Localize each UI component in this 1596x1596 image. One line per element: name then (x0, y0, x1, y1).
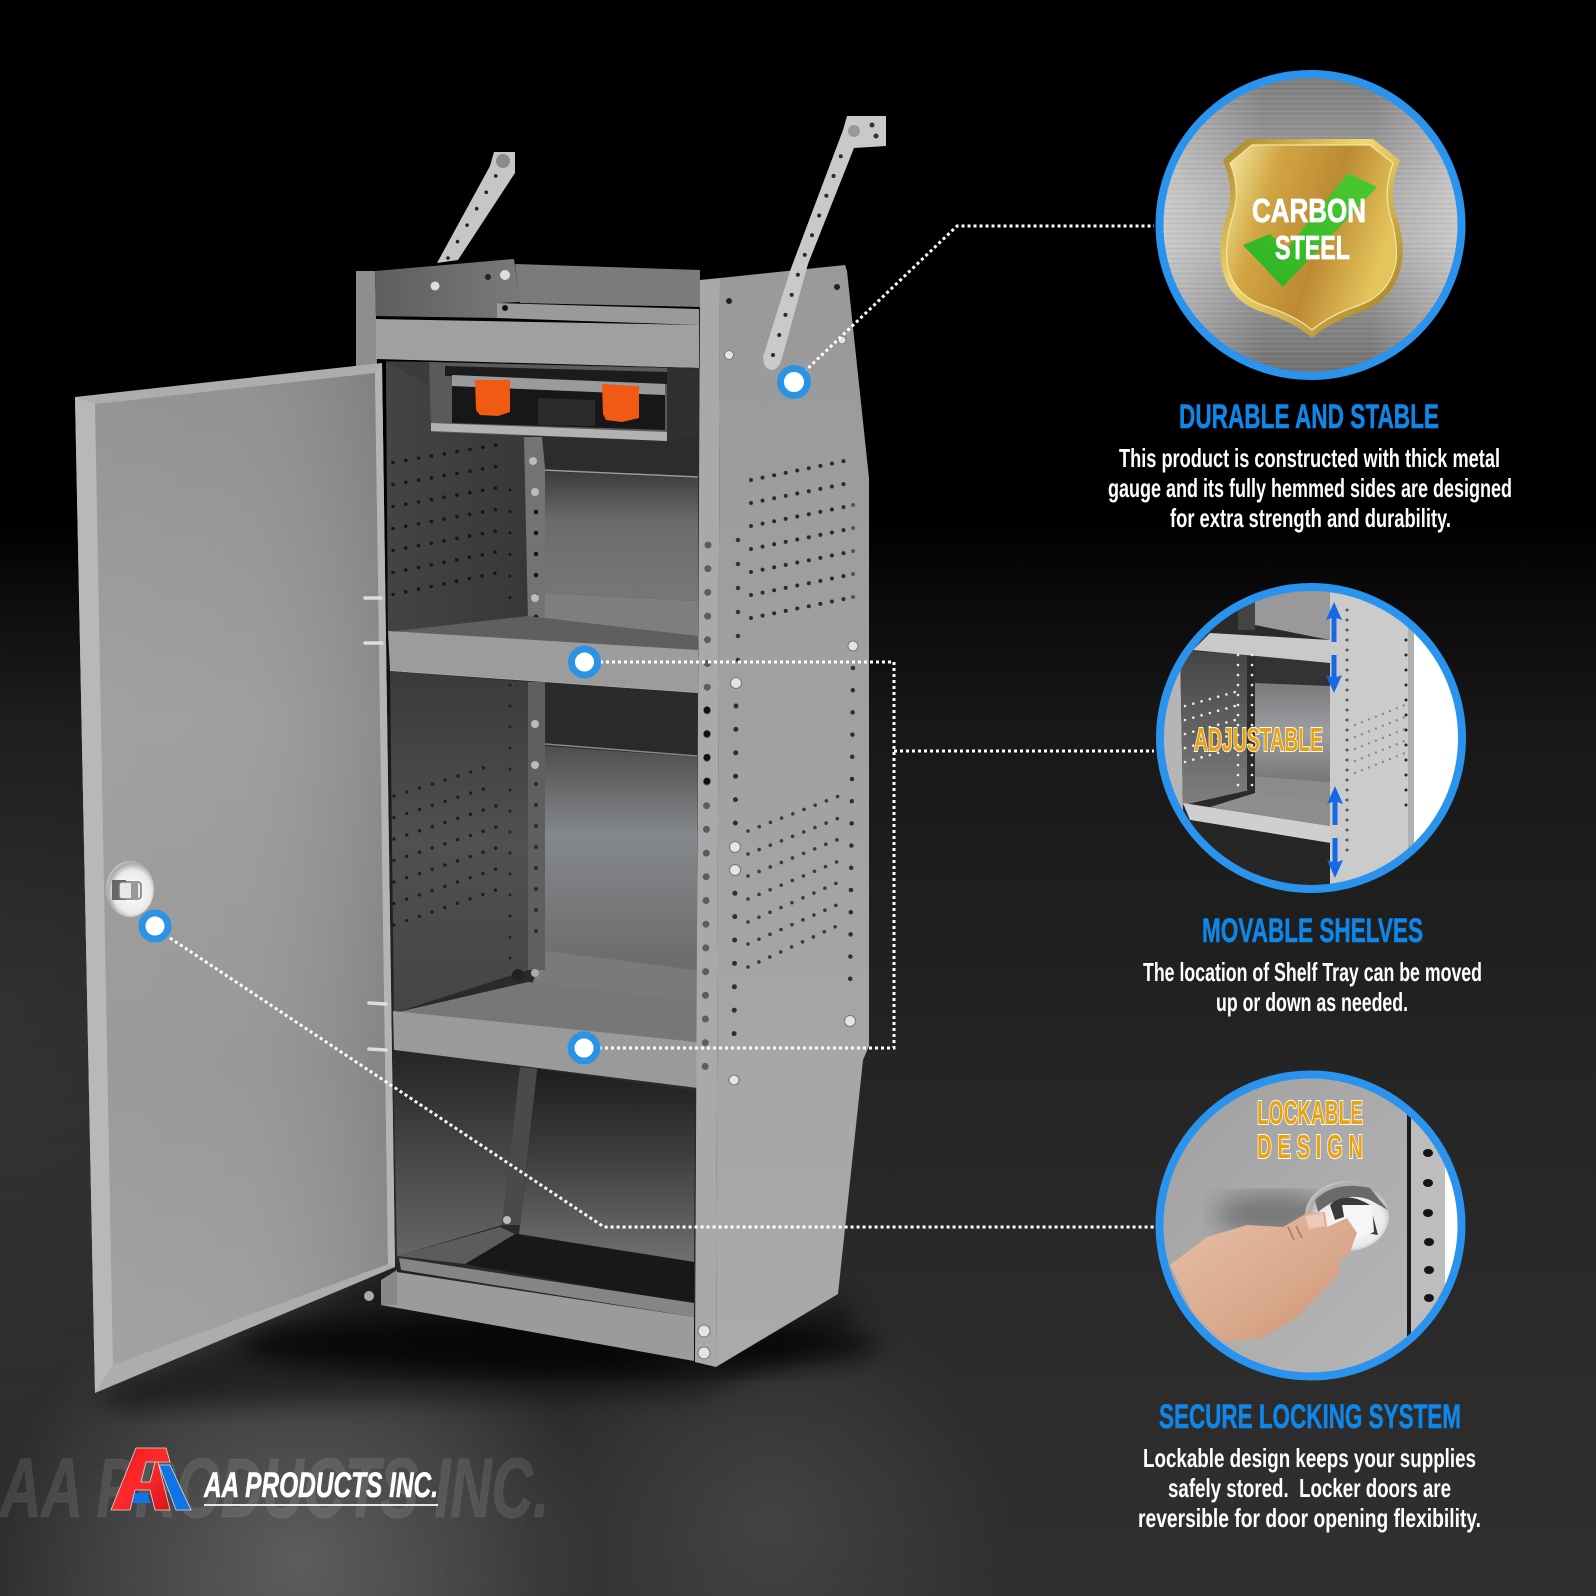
feature panel: movable shelves (1143, 580, 1482, 1017)
description (1138, 1443, 1481, 1533)
door lock handle (106, 861, 154, 917)
feature panel: carbon steel (1108, 74, 1512, 533)
description: reversible for door opening flexibility. (1138, 1503, 1481, 1533)
description: safely stored. Locker doors are (1168, 1473, 1451, 1503)
cabinet top section (356, 259, 700, 368)
description: up or down as needed. (1216, 987, 1408, 1017)
hole columns (705, 505, 853, 1090)
mounting bracket: front right (763, 116, 886, 370)
perforation grid middle (748, 796, 839, 967)
lock detail circle (1156, 1070, 1466, 1380)
hotspot: bracket (780, 368, 808, 396)
hotspot: lock (142, 913, 168, 939)
leader: movable shelves (600, 662, 1154, 1048)
heading: MOVABLE SHELVES (1202, 912, 1423, 950)
gold shield badge: STEEL (1275, 229, 1350, 266)
right side panel (695, 265, 869, 1367)
interior: upper bay (386, 361, 700, 640)
side panel (1330, 592, 1408, 884)
shelf faces (1193, 633, 1330, 663)
hand (1170, 1212, 1357, 1342)
leader: carbon steel (804, 226, 1154, 372)
shelf detail circle (1150, 580, 1470, 900)
organizer box body (452, 386, 665, 430)
green check mark (1243, 173, 1377, 287)
shelf 1 (388, 616, 698, 693)
perforation grid upper (751, 461, 844, 618)
logo wordmark: AA PRODUCTS INC. (203, 1466, 438, 1505)
chrome lock (1305, 1181, 1389, 1251)
interior: middle bay (390, 671, 698, 1045)
open door (75, 363, 395, 1393)
description (1108, 443, 1512, 533)
front edge strip (695, 278, 720, 1367)
base rail (364, 1258, 694, 1361)
watermark: company name: AA PRODUCTS INC. (0, 1441, 549, 1535)
orange latch left (475, 380, 510, 416)
lockable design label: LOCKABLE (1257, 1094, 1363, 1131)
bolts (698, 336, 858, 1359)
heading: DURABLE AND STABLE (1179, 398, 1439, 436)
tray lip (431, 423, 667, 441)
orange latch right (602, 384, 639, 422)
tool tray with organizer box (429, 362, 698, 441)
steel circle (1160, 74, 1462, 376)
feature panel: secure locking (1138, 1060, 1481, 1533)
lockable design label: DESIGN (1257, 1128, 1363, 1165)
company logo (111, 1448, 438, 1510)
shelf 2 (393, 982, 697, 1088)
hotspot markers (142, 368, 808, 1061)
interior: lower bay (393, 1050, 697, 1305)
mounting bracket: rear left (437, 152, 515, 263)
hotspot: lower shelf (571, 1035, 597, 1061)
cabinet (75, 116, 886, 1393)
badge text: CARBON (1252, 192, 1366, 229)
organizer box lid (452, 375, 665, 395)
dotted leader lines (170, 226, 1154, 1227)
description: for extra strength and durability. (1170, 503, 1451, 533)
lockable design label (1257, 1094, 1363, 1165)
hinges (365, 598, 386, 1050)
adjustable label: ADJUSTABLE (1194, 721, 1323, 758)
description: Lockable design keeps your supplies (1143, 1443, 1476, 1473)
leader: lock (170, 938, 1154, 1227)
blue adjust arrows (1326, 602, 1343, 878)
gold shield badge (1220, 139, 1403, 338)
hotspot: upper shelf (572, 649, 598, 675)
description (1143, 957, 1482, 1017)
logo mark (111, 1448, 191, 1510)
